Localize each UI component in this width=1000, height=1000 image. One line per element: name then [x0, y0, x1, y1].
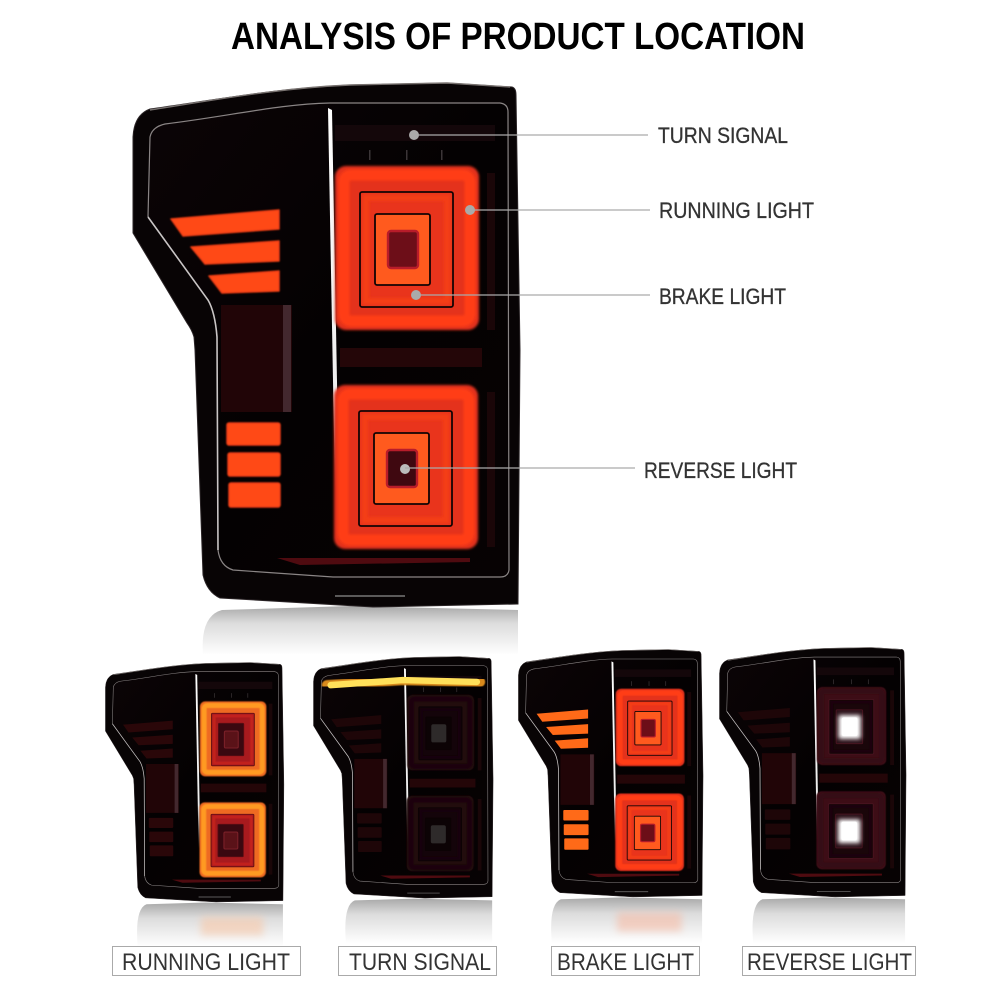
- lamp: running light state: [105, 663, 284, 947]
- housing: [314, 657, 493, 898]
- running and brake light upper square: [335, 166, 479, 330]
- main lamp reflection: [203, 606, 518, 655]
- callout: running light: RUNNING LIGHT: [659, 198, 814, 223]
- dim square upper with white lamp: [817, 687, 886, 765]
- callout: brake light: [411, 284, 786, 309]
- reflection: [137, 902, 283, 947]
- reflection: [551, 897, 702, 943]
- main lamp housing: [133, 83, 520, 607]
- reverse light lower square: [334, 385, 478, 549]
- main tail light: [133, 83, 520, 655]
- upper amber bars: [171, 210, 279, 293]
- lit bars upper: [537, 710, 588, 749]
- housing: [105, 663, 284, 902]
- reflected glow: [617, 912, 682, 931]
- label: reverse light: REVERSE LIGHT: [747, 949, 912, 976]
- dim square lower: [407, 796, 474, 871]
- lit bars lower: [563, 810, 589, 850]
- callout: turn signal: [409, 123, 788, 148]
- callout: reverse light: REVERSE LIGHT: [644, 458, 797, 483]
- lit square upper: [200, 701, 266, 776]
- lamp: turn signal state: [314, 657, 493, 943]
- lit square upper: [616, 689, 684, 766]
- lit square lower: [615, 794, 684, 871]
- dim square lower with white lamp: [816, 791, 886, 869]
- reflection: [345, 899, 492, 943]
- dim bars upper: [331, 715, 381, 753]
- lamp: brake light state: [518, 650, 703, 943]
- callout: brake light: BRAKE LIGHT: [659, 284, 786, 309]
- callouts: [400, 123, 814, 483]
- reflected glow: [201, 917, 263, 935]
- housing: [518, 650, 703, 897]
- dim bars lower: [149, 818, 173, 856]
- white glow lower: [838, 819, 860, 843]
- housing: [720, 648, 906, 897]
- callout: reverse light: [400, 458, 797, 483]
- reflection: [753, 897, 905, 944]
- callout: turn signal: TURN SIGNAL: [658, 123, 788, 148]
- dim bars upper: [123, 721, 173, 759]
- callout: running light: [465, 198, 814, 223]
- label: brake light: BRAKE LIGHT: [557, 949, 694, 976]
- lamp: reverse light state: [720, 648, 906, 944]
- label: turn signal: TURN SIGNAL: [349, 949, 491, 976]
- label: running light: RUNNING LIGHT: [122, 949, 290, 976]
- amber turn bar: [327, 680, 480, 685]
- lower amber bars: [227, 423, 280, 507]
- title: ANALYSIS OF PRODUCT LOCATION: [231, 16, 805, 58]
- dim bars lower: [765, 809, 790, 849]
- dim bars upper: [738, 708, 790, 747]
- white glow upper: [839, 715, 861, 739]
- dim square upper: [407, 695, 474, 770]
- dim bars lower: [357, 813, 382, 852]
- lit square lower: [200, 802, 266, 877]
